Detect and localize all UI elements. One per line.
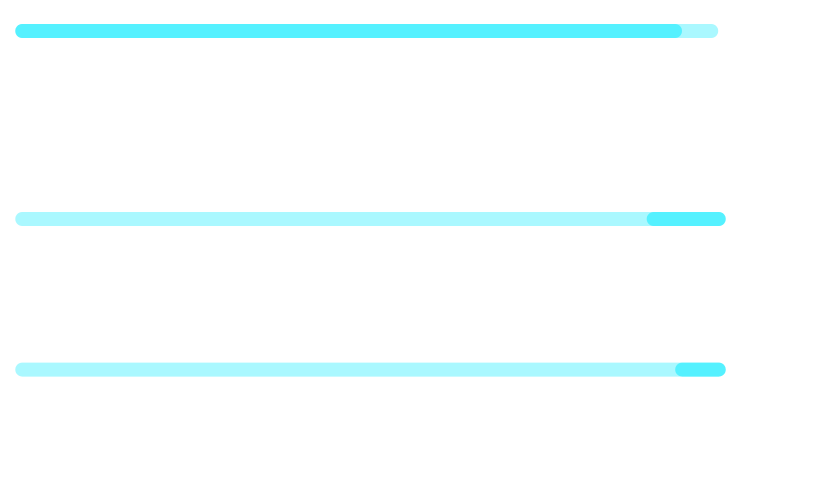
bar 1 fill xyxy=(15,24,682,38)
bar 2 track xyxy=(15,212,726,226)
bar 2 fill xyxy=(647,212,726,226)
bar 1 track xyxy=(15,24,718,38)
bar 3 fill xyxy=(675,363,726,377)
bar 3 track xyxy=(15,363,726,377)
